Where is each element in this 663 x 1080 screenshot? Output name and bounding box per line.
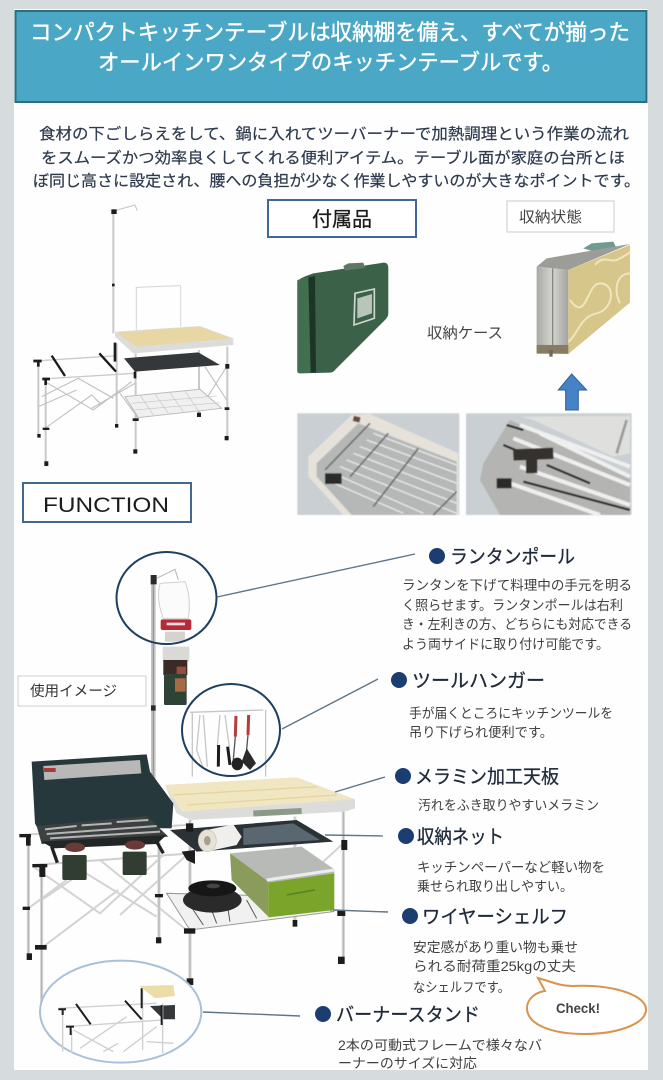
heading: accessories xyxy=(268,200,416,237)
feature: tool hanger: 吊り下げられ便利です。 xyxy=(409,725,553,740)
title line 2: オールインワンタイプのキッチンテーブルです。 xyxy=(98,50,563,75)
lantern pole xyxy=(151,569,178,800)
storage net xyxy=(170,820,333,864)
feature: melamine top: 汚れをふき取りやすいメラミン xyxy=(418,798,599,813)
leader line: melamine top xyxy=(335,777,385,792)
feature: wire shelf: なシェルフです。 xyxy=(413,980,510,995)
label: stored state xyxy=(507,201,614,232)
leader line: storage net xyxy=(325,835,383,836)
green cooler box xyxy=(230,847,334,917)
callout circle: lantern pole xyxy=(116,552,216,644)
leader line: burner stand xyxy=(203,1012,300,1016)
label: stored state: 収納状態 xyxy=(519,209,582,226)
photo: storage case xyxy=(297,263,388,373)
arrow: up xyxy=(558,374,587,410)
paper roll xyxy=(198,824,242,852)
callout: check: Check! xyxy=(556,1000,600,1016)
feature: burner stand: バーナースタンド xyxy=(336,1004,480,1026)
intro text: をスムーズかつ効率良くしてくれる便利アイテム。テーブル面が家庭の台所とほ xyxy=(41,148,625,167)
leader line: tool hanger xyxy=(282,679,378,729)
heading: function xyxy=(23,483,191,522)
label: usage image xyxy=(18,676,146,706)
photo: stored frame xyxy=(466,413,632,515)
feature: lantern pole xyxy=(402,546,632,652)
intro text: ぼ同じ高さに設定され、腰への負担が少なく作業しやすいのが大きなポイントです。 xyxy=(33,172,640,190)
feature: lantern pole: よう両サイドに取り付け可能です。 xyxy=(402,637,609,652)
label: storage case: 収納ケース xyxy=(427,325,503,342)
feature: lantern pole: く照らせます。ランタンポールは右利 xyxy=(402,598,623,613)
product photo: unfolded table xyxy=(33,205,233,466)
feature: melamine top: メラミン加工天板 xyxy=(415,766,559,788)
dutch oven xyxy=(183,880,242,913)
table frame xyxy=(19,810,347,1003)
feature: tool hanger xyxy=(391,670,613,740)
feature: melamine top xyxy=(395,766,599,813)
feature: burner stand: 2本の可動式フレームで様々なバ xyxy=(338,1038,542,1053)
photo: folded table xyxy=(537,242,630,357)
gas canisters xyxy=(62,852,147,880)
header banner xyxy=(16,11,646,102)
intro text: 食材の下ごしらえをして、鍋に入れてツーバーナーで加熱調理という作業の流れ xyxy=(39,125,630,143)
feature: tool hanger: ツールハンガー xyxy=(412,670,545,692)
usage image: table with stove xyxy=(19,569,355,1003)
feature: lantern pole: き・左利きの方、どちらにも対応できる xyxy=(402,617,632,632)
label: usage image: 使用イメージ xyxy=(30,683,117,700)
feature: storage net: キッチンペーパーなど軽い物を xyxy=(417,860,605,875)
feature: burner stand xyxy=(315,1004,542,1071)
title line 1: コンパクトキッチンテーブルは収納棚を備え、すべてが揃った xyxy=(30,20,630,45)
feature: tool hanger: 手が届くところにキッチンツールを xyxy=(409,706,613,721)
feature: burner stand: ーナーのサイズに対応 xyxy=(338,1056,478,1071)
feature: wire shelf: ワイヤーシェルフ xyxy=(422,907,568,928)
leader line: wire shelf xyxy=(333,910,388,912)
feature: wire shelf: られる耐荷重25kgの丈夫 xyxy=(413,959,577,974)
feature: lantern pole: ランタンを下げて料理中の手元を明る xyxy=(402,578,632,593)
feature: lantern pole: ランタンポール xyxy=(450,546,575,568)
heading: function: FUNCTION xyxy=(43,494,169,517)
feature: storage net: 収納ネット xyxy=(417,826,504,848)
callout circle: tool hanger xyxy=(182,684,280,776)
tool hanger xyxy=(190,710,266,777)
leader line: lantern pole xyxy=(217,554,415,597)
photo: stored wire shelf xyxy=(297,413,459,515)
lantern xyxy=(159,582,191,705)
two-burner stove xyxy=(32,754,173,863)
intro text xyxy=(33,125,640,190)
feature: storage net: 乗せられ取り出しやすい。 xyxy=(417,879,573,894)
feature: wire shelf: 安定感があり重い物も乗せ xyxy=(413,939,578,955)
callout: check xyxy=(527,978,646,1034)
feature: wire shelf xyxy=(402,907,578,995)
callout circle: burner stand xyxy=(40,961,201,1063)
feature: storage net xyxy=(398,826,605,894)
table top xyxy=(165,777,355,820)
heading: accessories: 付属品 xyxy=(312,208,372,231)
